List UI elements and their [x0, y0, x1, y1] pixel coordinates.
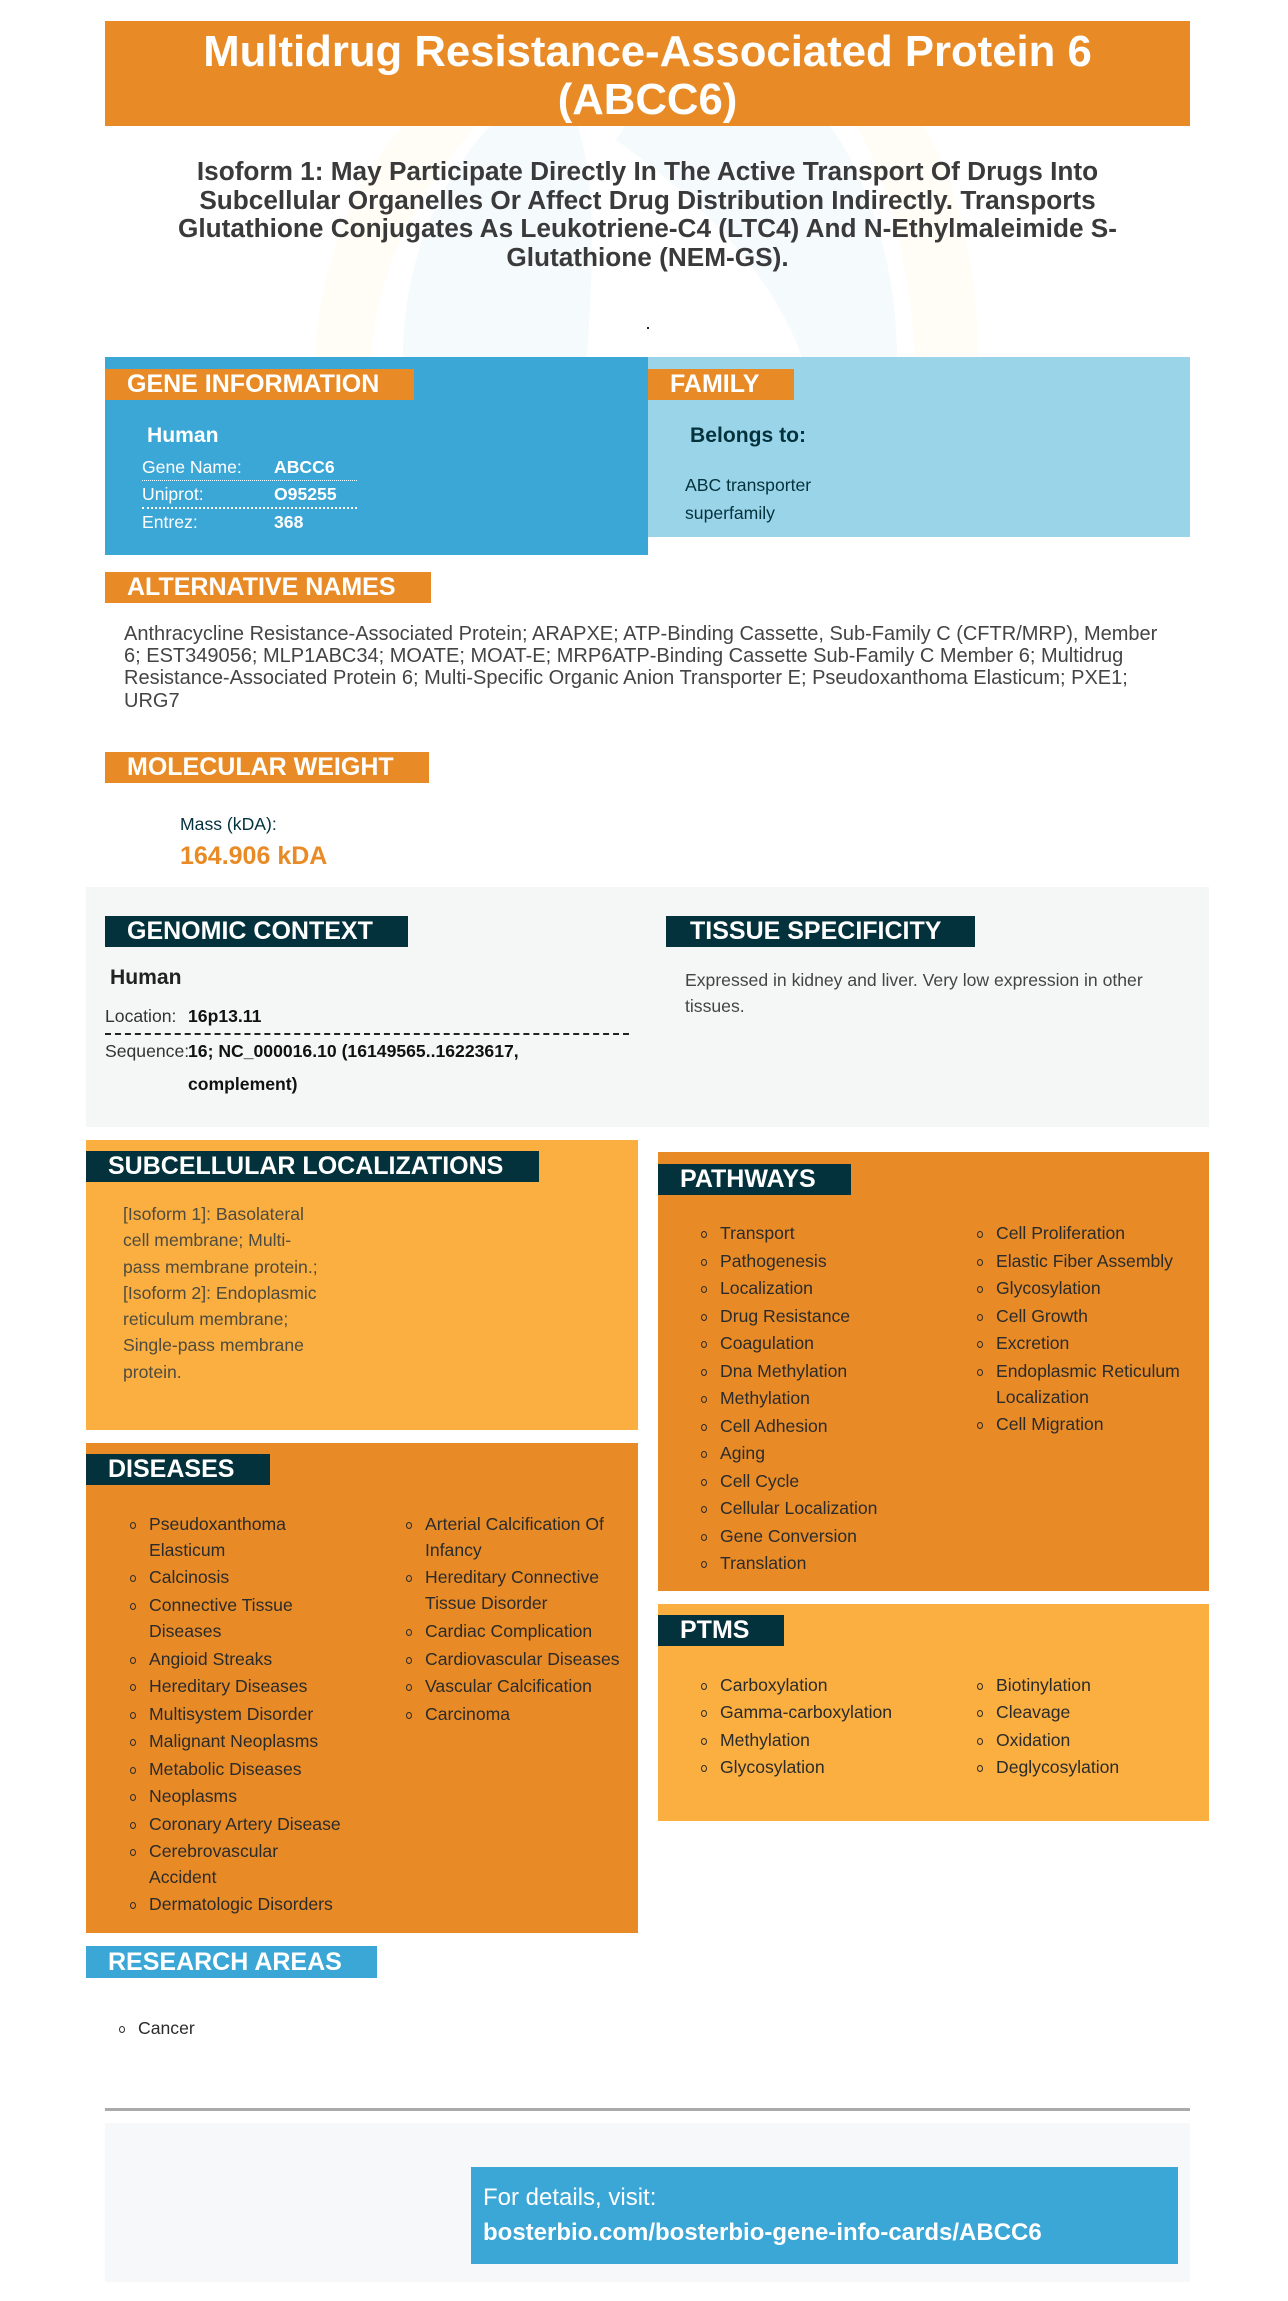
localization text: reticulum membrane; [123, 1309, 288, 1329]
heading: pathways [658, 1164, 851, 1195]
footer rule [105, 2108, 1190, 2111]
heading: diseases: DISEASES [108, 1455, 234, 1483]
family text: superfamily [685, 503, 775, 523]
heading: tissue specificity: TISSUE SPECIFICITY [690, 917, 941, 945]
heading: diseases [86, 1454, 270, 1485]
tissue specificity text: Expressed in kidney and liver. Very low expression in other [685, 970, 1143, 990]
disease list column 1 [130, 1514, 341, 1914]
details url: bosterbio.com/bosterbio-gene-info-cards/ABCC6 [483, 2219, 1042, 2246]
pathway list column 1: Methylation [720, 1388, 810, 1408]
panel: genomic context and tissue specificity: 16p13.11 [188, 1006, 261, 1026]
localization text: [Isoform 1]: Basolateral [123, 1204, 304, 1224]
tissue specificity text [685, 970, 1143, 1016]
ptm list column 1: Gamma-carboxylation [720, 1702, 892, 1722]
details label: For details, visit: [483, 2184, 656, 2211]
panel: pathways [658, 1152, 1209, 1591]
disease list column 1: Multisystem Disorder [149, 1704, 313, 1724]
entrez row [142, 512, 303, 532]
disease list column 1: Calcinosis [149, 1567, 229, 1587]
alternative names text: 6; EST349056; MLP1ABC34; MOATE; MOAT-E; MRP6ATP-Binding Cassette Sub-Family C Member 6; Multidrug [124, 645, 1123, 667]
disease list column 2 [406, 1514, 620, 1724]
disease list column 1: Cerebrovascular [149, 1841, 278, 1861]
family text [685, 475, 811, 523]
heading: subcellular localizations: SUBCELLULAR LOCALIZATIONS [108, 1152, 503, 1180]
pathway list column 1 [701, 1223, 877, 1573]
heading: ptms: PTMS [680, 1616, 749, 1644]
pathway list column 2: Localization [996, 1387, 1089, 1407]
disease list column 2: Cardiovascular Diseases [425, 1649, 620, 1669]
heading: pathways: PATHWAYS [680, 1165, 816, 1193]
disease list column 1: Angioid Streaks [149, 1649, 272, 1669]
alternative names text: Resistance-Associated Protein 6; Multi-Specific Organic Anion Transporter E; Pseudoxanthoma Elasticum; PXE1; [124, 667, 1128, 689]
localization text: [Isoform 2]: Endoplasmic [123, 1283, 317, 1303]
panel: family [648, 357, 1190, 537]
mass value: 164.906 kDA [180, 842, 327, 870]
heading: genomic context: GENOMIC CONTEXT [127, 917, 373, 945]
disease list column 2: Arterial Calcification Of [425, 1514, 604, 1534]
heading: gene information: GENE INFORMATION [127, 370, 379, 398]
belongs to label: Belongs to: [690, 424, 806, 447]
pathway list column 2: Cell Proliferation [996, 1223, 1125, 1243]
disease list column 1: Dermatologic Disorders [149, 1894, 333, 1914]
pathway list column 2: Elastic Fiber Assembly [996, 1251, 1173, 1271]
disease list column 2: Vascular Calcification [425, 1676, 592, 1696]
gene name row [142, 454, 357, 481]
pathway list column 1: Pathogenesis [720, 1251, 827, 1271]
pathway list column 1: Aging [720, 1443, 765, 1463]
disease list column 1: Malignant Neoplasms [149, 1731, 318, 1751]
ptm list column 2 [977, 1675, 1119, 1777]
disease list column 1: Elasticum [149, 1540, 225, 1560]
panel: genomic context and tissue specificity [86, 887, 1209, 1127]
pathway list column 1: Cell Adhesion [720, 1416, 828, 1436]
disease list column 1: Connective Tissue [149, 1595, 293, 1615]
panel: footer [105, 2123, 1190, 2282]
disease list column 1: Coronary Artery Disease [149, 1814, 341, 1834]
localization text: protein. [123, 1362, 182, 1382]
pathway list column 1: Translation [720, 1553, 806, 1573]
title: (ABCC6) [558, 75, 737, 124]
localization text: Single-pass membrane [123, 1335, 304, 1355]
subtitle description [178, 156, 1117, 272]
family text: ABC transporter [685, 475, 811, 495]
pathway list column 1: Transport [720, 1223, 795, 1243]
subtitle description: Glutathione (NEM-GS). [506, 242, 789, 272]
ptm list column 2: Oxidation [996, 1730, 1070, 1750]
sequence row [105, 1041, 519, 1094]
alternative names text: URG7 [124, 690, 180, 712]
disease list column 1: Pseudoxanthoma [149, 1514, 286, 1534]
panel: subcellular localizations [86, 1140, 638, 1430]
heading: family: FAMILY [670, 370, 759, 398]
pathway list column 1: Dna Methylation [720, 1361, 847, 1381]
disease list column 1: Accident [149, 1867, 216, 1887]
pathway list column 1: Drug Resistance [720, 1306, 850, 1326]
panel: genomic context and tissue specificity: complement) [188, 1074, 298, 1094]
pathway list column 1: Cell Cycle [720, 1471, 799, 1491]
uniprot row: O95255 [274, 484, 337, 504]
localization text [123, 1204, 318, 1382]
subtitle description: Glutathione Conjugates As Leukotriene-C4 (LTC4) And N-Ethylmaleimide S- [178, 213, 1117, 243]
disease list column 2: Infancy [425, 1540, 482, 1560]
ptm list column 1: Glycosylation [720, 1757, 825, 1777]
ptm list column 2: Biotinylation [996, 1675, 1091, 1695]
pathway list column 2 [977, 1223, 1180, 1434]
pathway list column 2: Glycosylation [996, 1278, 1101, 1298]
disease list column 1: Metabolic Diseases [149, 1759, 302, 1779]
localization text: pass membrane protein.; [123, 1257, 318, 1277]
disease list column 2: Cardiac Complication [425, 1621, 592, 1641]
location row [105, 1006, 261, 1026]
localization text: cell membrane; Multi- [123, 1230, 291, 1250]
subtitle description: Isoform 1: May Participate Directly In The Active Transport Of Drugs Into [197, 156, 1098, 186]
pathway list column 2: Cell Growth [996, 1306, 1088, 1326]
pathway list column 2: Cell Migration [996, 1414, 1104, 1434]
pathway list column 1: Gene Conversion [720, 1526, 857, 1546]
heading: family [648, 369, 794, 400]
heading: research areas: RESEARCH AREAS [108, 1948, 342, 1976]
ptm list column 2: Cleavage [996, 1702, 1070, 1722]
entrez row: Entrez: [142, 512, 198, 532]
panel: genomic context and tissue specificity: 16; NC_000016.10 (16149565..16223617, [188, 1041, 519, 1061]
panel: gene information: 368 [274, 512, 303, 532]
ptm list column 1 [701, 1675, 892, 1777]
title [203, 27, 1092, 124]
heading: ptms [658, 1615, 784, 1646]
sequence row: Sequence: [105, 1041, 189, 1061]
alternative names text [124, 623, 1157, 712]
pathway list column 1: Coagulation [720, 1333, 814, 1353]
panel: ptms [658, 1604, 1209, 1821]
pathway list column 1: Cellular Localization [720, 1498, 877, 1518]
tissue specificity text: tissues. [685, 996, 745, 1016]
ptm list column 1: Methylation [720, 1730, 810, 1750]
ptm list column 2: Deglycosylation [996, 1757, 1119, 1777]
disease list column 2: Tissue Disorder [425, 1593, 548, 1613]
dashed separator [105, 1033, 629, 1035]
panel: gene information [105, 357, 648, 555]
research areas list: Cancer [138, 2018, 195, 2038]
uniprot row [142, 481, 357, 509]
mass label: Mass (kDA): [180, 814, 277, 834]
heading: alternative names: ALTERNATIVE NAMES [127, 573, 396, 601]
gene name row: ABCC6 [274, 457, 335, 477]
title: Multidrug Resistance-Associated Protein 6 [203, 27, 1092, 76]
pathway list column 2: Endoplasmic Reticulum [996, 1361, 1180, 1381]
ptm list column 1: Carboxylation [720, 1675, 828, 1695]
disease list column 2: Carcinoma [425, 1704, 510, 1724]
disease list column 1: Hereditary Diseases [149, 1676, 307, 1696]
location row: Location: [105, 1006, 176, 1026]
panel: diseases [86, 1443, 638, 1933]
uniprot row: Uniprot: [142, 484, 204, 504]
disease list column 1: Neoplasms [149, 1786, 237, 1806]
title banner [105, 21, 1190, 126]
disease list column 2: Hereditary Connective [425, 1567, 599, 1587]
small dot [647, 327, 649, 329]
heading: molecular weight: MOLECULAR WEIGHT [127, 753, 394, 781]
pathway list column 1: Localization [720, 1278, 813, 1298]
alternative names text: Anthracycline Resistance-Associated Protein; ARAPXE; ATP-Binding Cassette, Sub-Family C (CFTR/MRP), Member [124, 623, 1157, 645]
species label: Human [110, 966, 182, 989]
subtitle description: Subcellular Organelles Or Affect Drug Distribution Indirectly. Transports [199, 185, 1096, 215]
gene name row: Gene Name: [142, 457, 242, 477]
background watermark [315, 126, 978, 357]
pathway list column 2: Excretion [996, 1333, 1069, 1353]
callout: details link [471, 2167, 1178, 2264]
disease list column 1: Diseases [149, 1621, 221, 1641]
species label: Human [147, 424, 218, 447]
